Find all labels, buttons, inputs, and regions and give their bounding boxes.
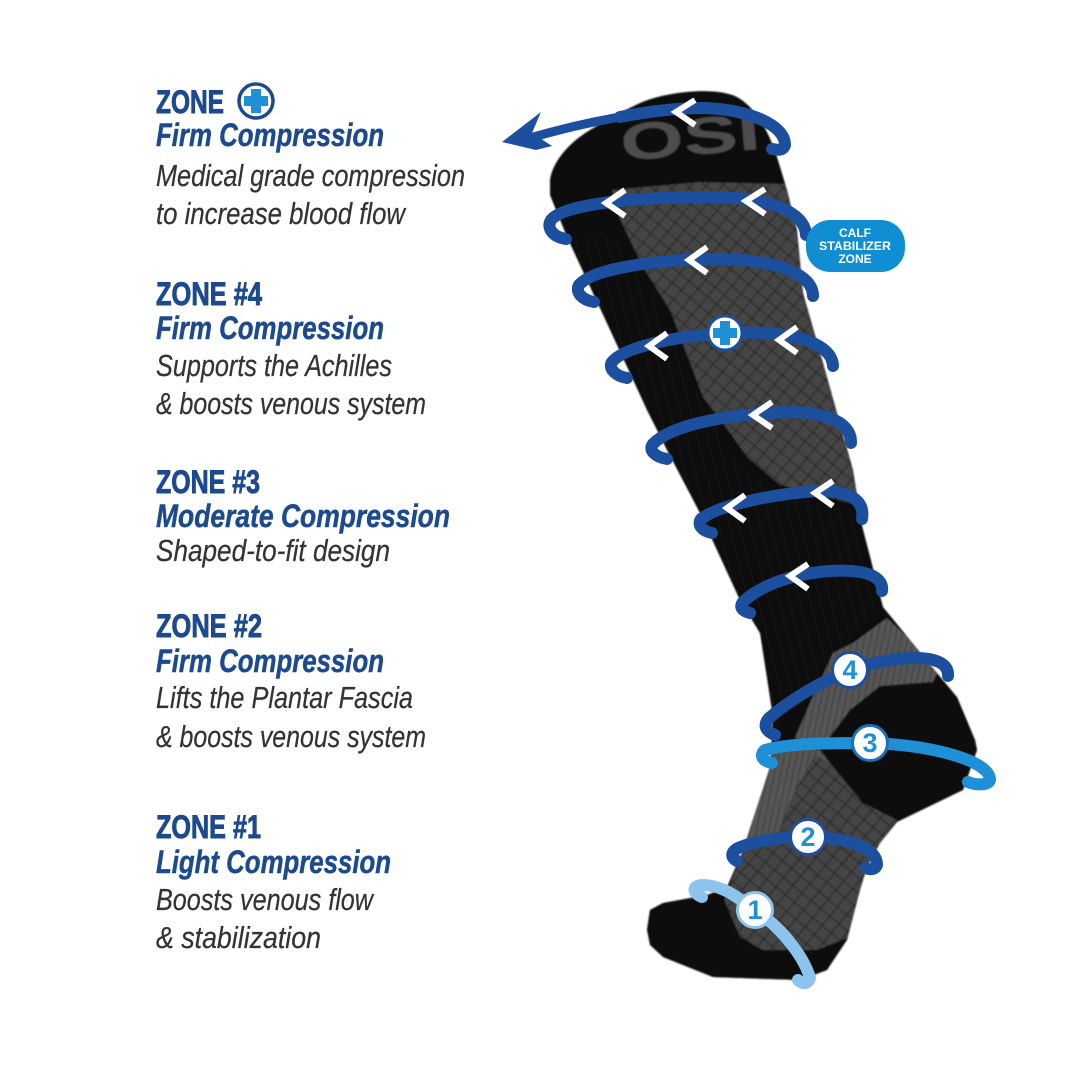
ring: zone 2 <box>732 820 877 869</box>
callout: calf stabilizer zone: STABILIZER <box>819 239 891 253</box>
description: zone plus: Medical grade compression <box>156 158 465 193</box>
description: zone plus <box>156 158 465 231</box>
badge: 1: 1 <box>747 895 763 925</box>
ring: fourth with plus badge <box>611 316 833 378</box>
ring: seventh <box>741 564 882 613</box>
description: zone 1: & stabilization <box>156 920 321 955</box>
badge: 3 <box>852 726 888 760</box>
description: zone plus: to increase blood flow <box>156 196 407 231</box>
ring: zone 4 <box>766 652 948 735</box>
description: zone 2 <box>156 680 426 754</box>
heel black panel <box>820 682 977 820</box>
ankle gray panel <box>795 618 937 745</box>
calf stabilizer mesh panel <box>612 182 858 505</box>
text panel: zone 1 <box>156 809 391 955</box>
lower foot ribbed panel <box>743 745 830 850</box>
text panel: zone 2 <box>156 608 426 754</box>
text panel: zone 3 <box>156 464 450 568</box>
heading: zone plus: ZONE <box>156 84 224 120</box>
badge: 2: 2 <box>800 822 816 852</box>
ring: sixth <box>700 481 862 533</box>
text panel: zone plus <box>156 84 465 231</box>
ring: zone 1 <box>694 885 810 983</box>
ring: third <box>578 247 813 302</box>
foot mesh panel <box>723 755 897 950</box>
callout: calf stabilizer zone: CALF <box>839 226 871 240</box>
description: zone 4 <box>156 348 426 421</box>
description: zone 2: & boosts venous system <box>156 719 426 754</box>
heading: zone 1: ZONE #1 <box>156 809 261 845</box>
callout: calf stabilizer zone <box>806 220 905 272</box>
description: zone 4: & boosts venous system <box>156 386 426 421</box>
badge: 4: 4 <box>842 655 858 685</box>
ring: zone 3 <box>762 726 990 784</box>
description: zone 3: Shaped-to-fit design <box>156 533 390 568</box>
subheading: zone 4: Firm Compression <box>156 310 384 346</box>
sock silhouette <box>550 91 977 980</box>
heading: zone 4: ZONE #4 <box>156 276 262 312</box>
ribbed black leg panel <box>570 235 883 730</box>
rings and arrows <box>502 100 990 983</box>
icon: plus badge <box>239 84 273 118</box>
logo band: OSI <box>618 103 763 173</box>
description: zone 1: Boosts venous flow <box>156 882 375 917</box>
text panel: zone 4 <box>156 276 426 421</box>
heading: zone 2: ZONE #2 <box>156 608 262 644</box>
description: zone 4: Supports the Achilles <box>156 348 392 383</box>
ring: second <box>549 189 806 239</box>
subheading: zone 1: Light Compression <box>156 844 391 880</box>
subheading: firm compression: Firm Compression <box>156 117 384 153</box>
badge: 4 <box>832 652 868 688</box>
badge: 3: 3 <box>862 728 878 758</box>
ring: fifth <box>651 402 851 459</box>
ring: top with arrow <box>502 100 785 150</box>
subheading: zone 2: Firm Compression <box>156 643 384 679</box>
heading: zone 3: ZONE #3 <box>156 464 260 500</box>
toe dark panel <box>647 895 847 980</box>
subheading: zone 3: Moderate Compression <box>156 498 450 534</box>
callout: calf stabilizer zone: ZONE <box>838 252 872 266</box>
sock illustration <box>550 91 977 980</box>
badge: 2 <box>790 820 826 854</box>
description: zone 1 <box>156 882 375 955</box>
icon: plus badge on ring <box>708 316 742 350</box>
description: zone 2: Lifts the Plantar Fascia <box>156 680 413 715</box>
